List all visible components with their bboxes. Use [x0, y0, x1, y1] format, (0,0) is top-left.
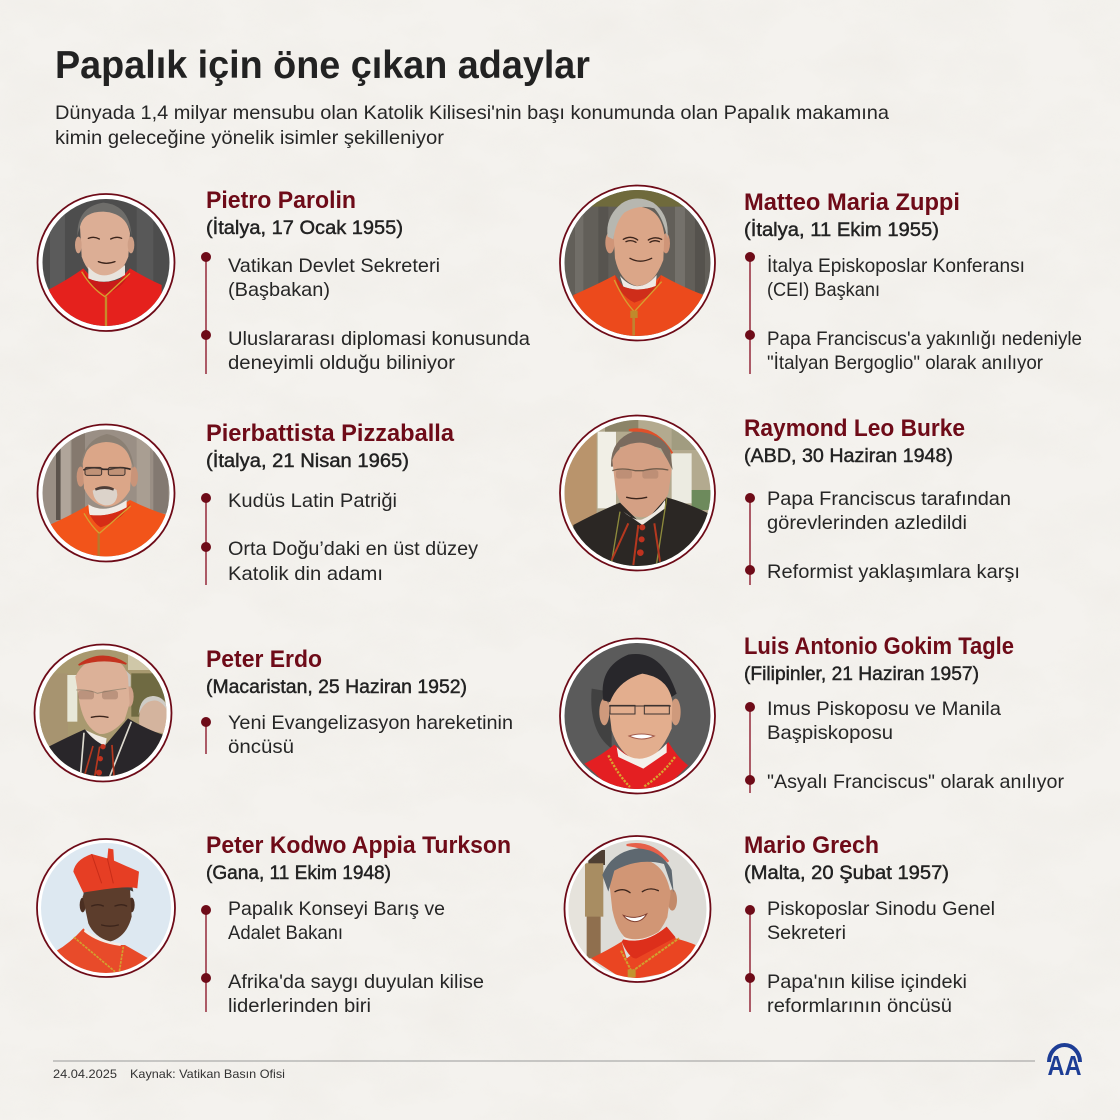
panel: Pierbattista Pizzaballa — [37, 420, 478, 585]
details: Papa Franciscus'a yakınlığı nedeniyle — [767, 328, 1082, 350]
subtitle: Dünyada 1,4 milyar mensubu olan Katolik Kilisesi'nin başı konumunda olan Papalık makamına — [55, 102, 889, 124]
footer date and source — [53, 1067, 285, 1081]
origin and birth date: (Malta, 20 Şubat 1957) — [744, 862, 949, 884]
details: Başpiskoposu — [767, 722, 893, 744]
origin and birth date: (Macaristan, 25 Haziran 1952) — [206, 676, 467, 698]
details: Papa'nın kilise içindeki — [767, 971, 967, 993]
details: Uluslararası diplomasi konusunda — [228, 328, 530, 350]
details — [767, 698, 1065, 793]
details: Sekreteri — [767, 922, 846, 944]
portrait: Pierbattista Pizzaballa — [37, 424, 177, 567]
details: İtalya Episkoposlar Konferansı — [767, 254, 1025, 277]
details: Piskoposlar Sinodu Genel — [767, 898, 995, 920]
details: Imus Piskoposu ve Manila — [767, 698, 1001, 720]
details — [228, 490, 478, 585]
origin and birth date: (İtalya, 17 Ocak 1955) — [206, 216, 403, 239]
origin and birth date: (İtalya, 11 Ekim 1955) — [744, 218, 939, 241]
details — [767, 488, 1020, 583]
details: Kudüs Latin Patriği — [228, 490, 397, 512]
details: Vatikan Devlet Sekreteri — [228, 255, 440, 277]
timeline — [745, 905, 755, 1012]
details: "İtalyan Bergoglio" olarak anılıyor — [767, 351, 1043, 374]
icon: AA logo: AA — [1048, 1050, 1082, 1081]
panel: Mario Grech — [564, 832, 995, 1017]
portrait: Peter Erdo — [34, 644, 175, 787]
details: Papa Franciscus tarafından — [767, 488, 1011, 510]
details — [767, 898, 995, 1017]
origin and birth date: (İtalya, 21 Nisan 1965) — [206, 449, 409, 472]
portrait: Mario Grech — [564, 836, 712, 983]
name: Matteo Maria Zuppi — [744, 189, 960, 216]
name: Peter Kodwo Appia Turkson — [206, 832, 511, 859]
footer date and source: Kaynak: Vatikan Basın Ofisi — [130, 1067, 285, 1081]
name: Peter Erdo — [206, 646, 322, 673]
name: Pierbattista Pizzaballa — [206, 420, 454, 447]
details: (Başbakan) — [228, 279, 330, 301]
details — [228, 898, 484, 1017]
details: (CEI) Başkanı — [767, 279, 880, 301]
panel: Peter Erdo — [34, 644, 513, 787]
origin and birth date: (Gana, 11 Ekim 1948) — [206, 862, 391, 884]
details: liderlerinden biri — [228, 995, 371, 1017]
details: Orta Doğu’daki en üst düzey — [228, 538, 478, 560]
panel: Peter Kodwo Appia Turkson — [33, 832, 511, 1017]
name: Pietro Parolin — [206, 187, 356, 214]
details: deneyimli olduğu biliniyor — [228, 352, 456, 374]
details — [767, 254, 1082, 374]
timeline — [201, 493, 211, 585]
name: Luis Antonio Gokim Tagle — [744, 633, 1014, 660]
portrait: Pietro Parolin — [33, 190, 174, 337]
portrait: Matteo Maria Zuppi — [560, 186, 715, 340]
portrait: Raymond Leo Burke — [560, 416, 715, 570]
details: öncüsü — [228, 736, 294, 758]
portrait: Luis Antonio Gokim Tagle — [560, 638, 715, 794]
panel: Raymond Leo Burke — [560, 415, 1020, 585]
details — [228, 712, 513, 758]
details: Reformist yaklaşımlara karşı — [767, 561, 1020, 583]
details: görevlerinden azledildi — [767, 512, 967, 534]
timeline — [201, 252, 211, 374]
details: Afrika'da saygı duyulan kilise — [228, 971, 484, 993]
name: Mario Grech — [744, 832, 879, 859]
subtitle: kimin geleceğine yönelik isimler şekilleniyor — [55, 127, 445, 149]
footer date and source: 24.04.2025 — [53, 1067, 117, 1081]
details: Katolik din adamı — [228, 563, 383, 585]
name: Raymond Leo Burke — [744, 415, 965, 442]
details: Adalet Bakanı — [228, 922, 343, 944]
timeline — [745, 702, 755, 793]
timeline — [745, 252, 755, 374]
details: Papalık Konseyi Barış ve — [228, 898, 445, 920]
origin and birth date: (Filipinler, 21 Haziran 1957) — [744, 663, 979, 685]
timeline — [201, 905, 211, 1012]
details: reformlarının öncüsü — [767, 995, 952, 1017]
portrait: Peter Kodwo Appia Turkson — [33, 837, 180, 983]
details: Yeni Evangelizasyon hareketinin — [228, 712, 513, 734]
panel: Luis Antonio Gokim Tagle — [560, 633, 1065, 794]
origin and birth date: (ABD, 30 Haziran 1948) — [744, 445, 953, 467]
panel: Matteo Maria Zuppi — [560, 186, 1082, 374]
title: Papalık için öne çıkan adaylar — [55, 44, 590, 87]
timeline — [745, 493, 755, 585]
details — [228, 255, 530, 374]
subtitle — [55, 102, 889, 149]
timeline — [201, 717, 211, 754]
panel: Pietro Parolin — [33, 187, 530, 374]
details: "Asyalı Franciscus" olarak anılıyor — [767, 771, 1065, 793]
